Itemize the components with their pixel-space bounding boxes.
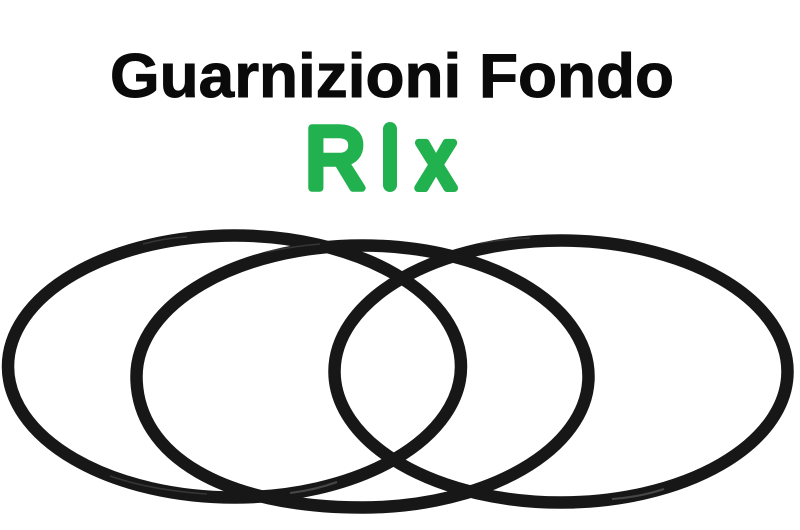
icon: left o-ring [8,236,461,498]
icon: middle o-ring [136,244,588,508]
title: Guarnizioni Fondo [110,42,674,111]
logo: RIx [305,110,455,207]
logo: RIx: R [305,110,366,207]
logo: RIx: x [417,112,455,207]
icon: right o-ring [334,238,788,502]
